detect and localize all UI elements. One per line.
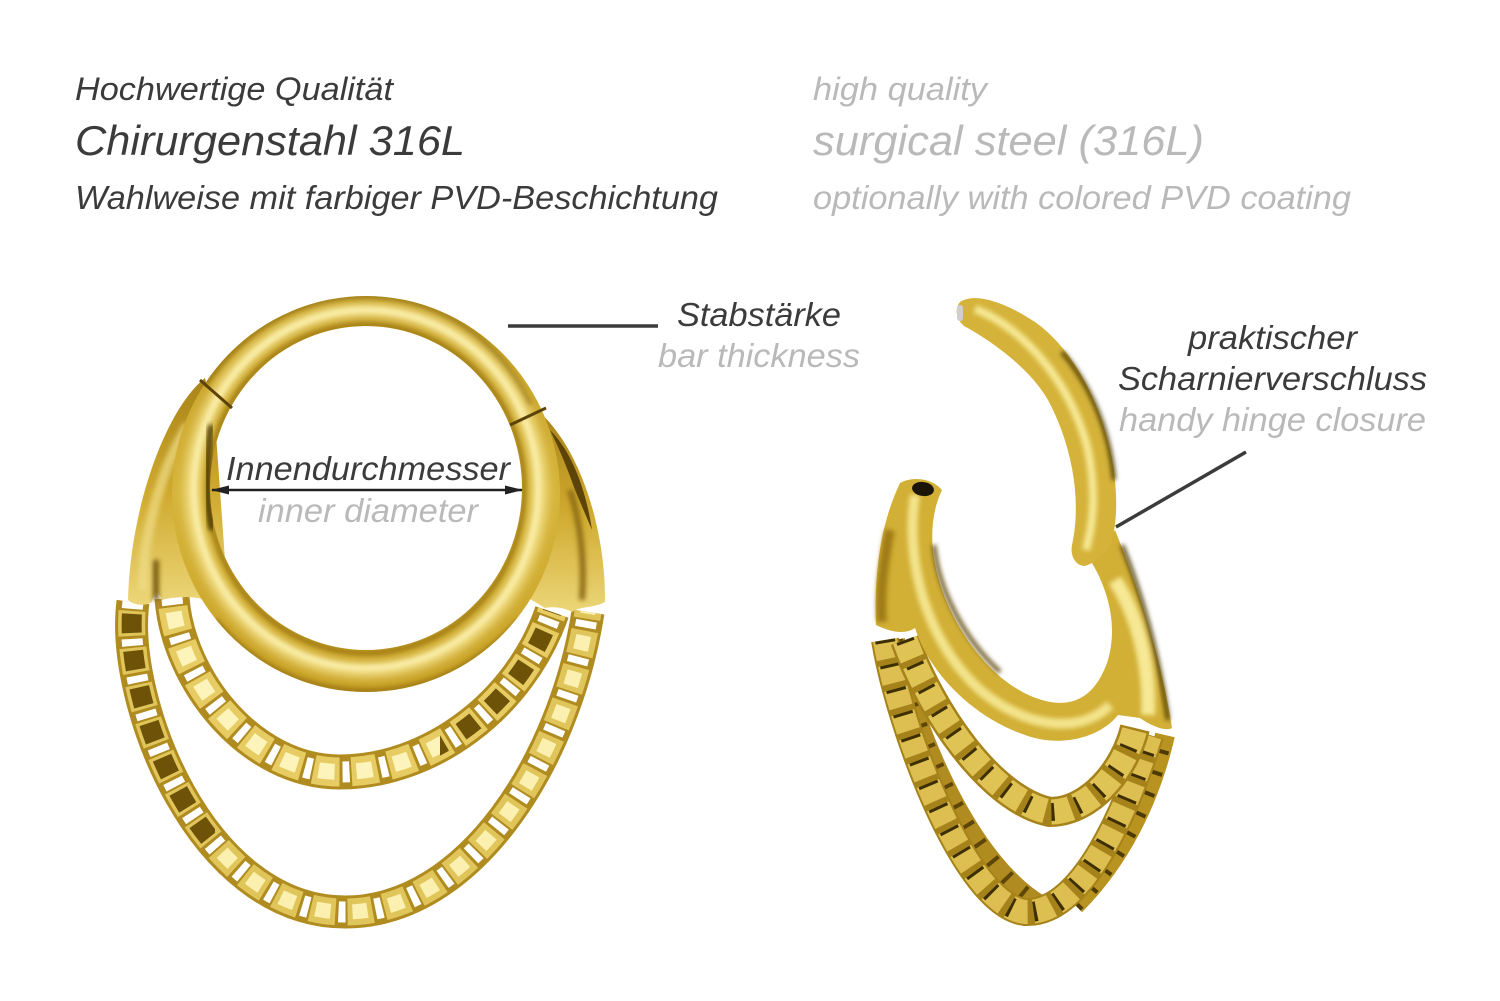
left wing (128, 378, 225, 605)
crescent bore hole (911, 481, 935, 497)
inner chain, front view (172, 598, 552, 772)
heading: German quality text: Wahlweise mit farbiger PVD-Beschichtung (75, 179, 719, 216)
label: hinge closure: handy hinge closure (1119, 401, 1426, 438)
label: bar thickness (508, 296, 860, 374)
crescent highlights (881, 495, 1168, 724)
heading: English quality text: high quality (813, 71, 989, 107)
heading: English quality text: optionally with colored PVD coating (813, 179, 1352, 216)
outer chain, front view (132, 602, 588, 912)
heading: German quality text: Hochwertige Qualität (75, 71, 394, 107)
label: hinge closure: praktischer (1187, 319, 1359, 356)
main ring band (172, 296, 560, 692)
upper arc (957, 298, 1116, 566)
upper arc shading (975, 309, 1114, 550)
closure pin tip (957, 305, 963, 321)
label: inner diameter (212, 450, 522, 529)
label: inner diameter: inner diameter (258, 492, 480, 529)
side view ring with chains (876, 298, 1172, 912)
label: hinge closure: Scharnierverschluss (1118, 360, 1427, 397)
second strand, side view (895, 640, 1165, 905)
heading: German quality text: Chirurgenstahl 316L (75, 117, 465, 164)
ring shading (192, 297, 540, 691)
hinge seams (200, 380, 546, 425)
label: inner diameter: Innendurchmesser (226, 450, 512, 487)
lower crescent (876, 479, 1172, 741)
label: bar thickness: Stabstärke (677, 296, 841, 333)
wing shading (143, 425, 583, 600)
inner chain, side view (905, 640, 1135, 812)
heading: English quality text (813, 71, 1352, 216)
right wing (515, 408, 605, 612)
label: bar thickness: bar thickness (658, 337, 860, 374)
outer chain, side view (885, 640, 1150, 912)
heading: English quality text: surgical steel (316L) (813, 117, 1204, 164)
front view ring with chains (128, 296, 605, 912)
label: hinge closure (1116, 319, 1427, 527)
heading: German quality text (75, 71, 719, 216)
